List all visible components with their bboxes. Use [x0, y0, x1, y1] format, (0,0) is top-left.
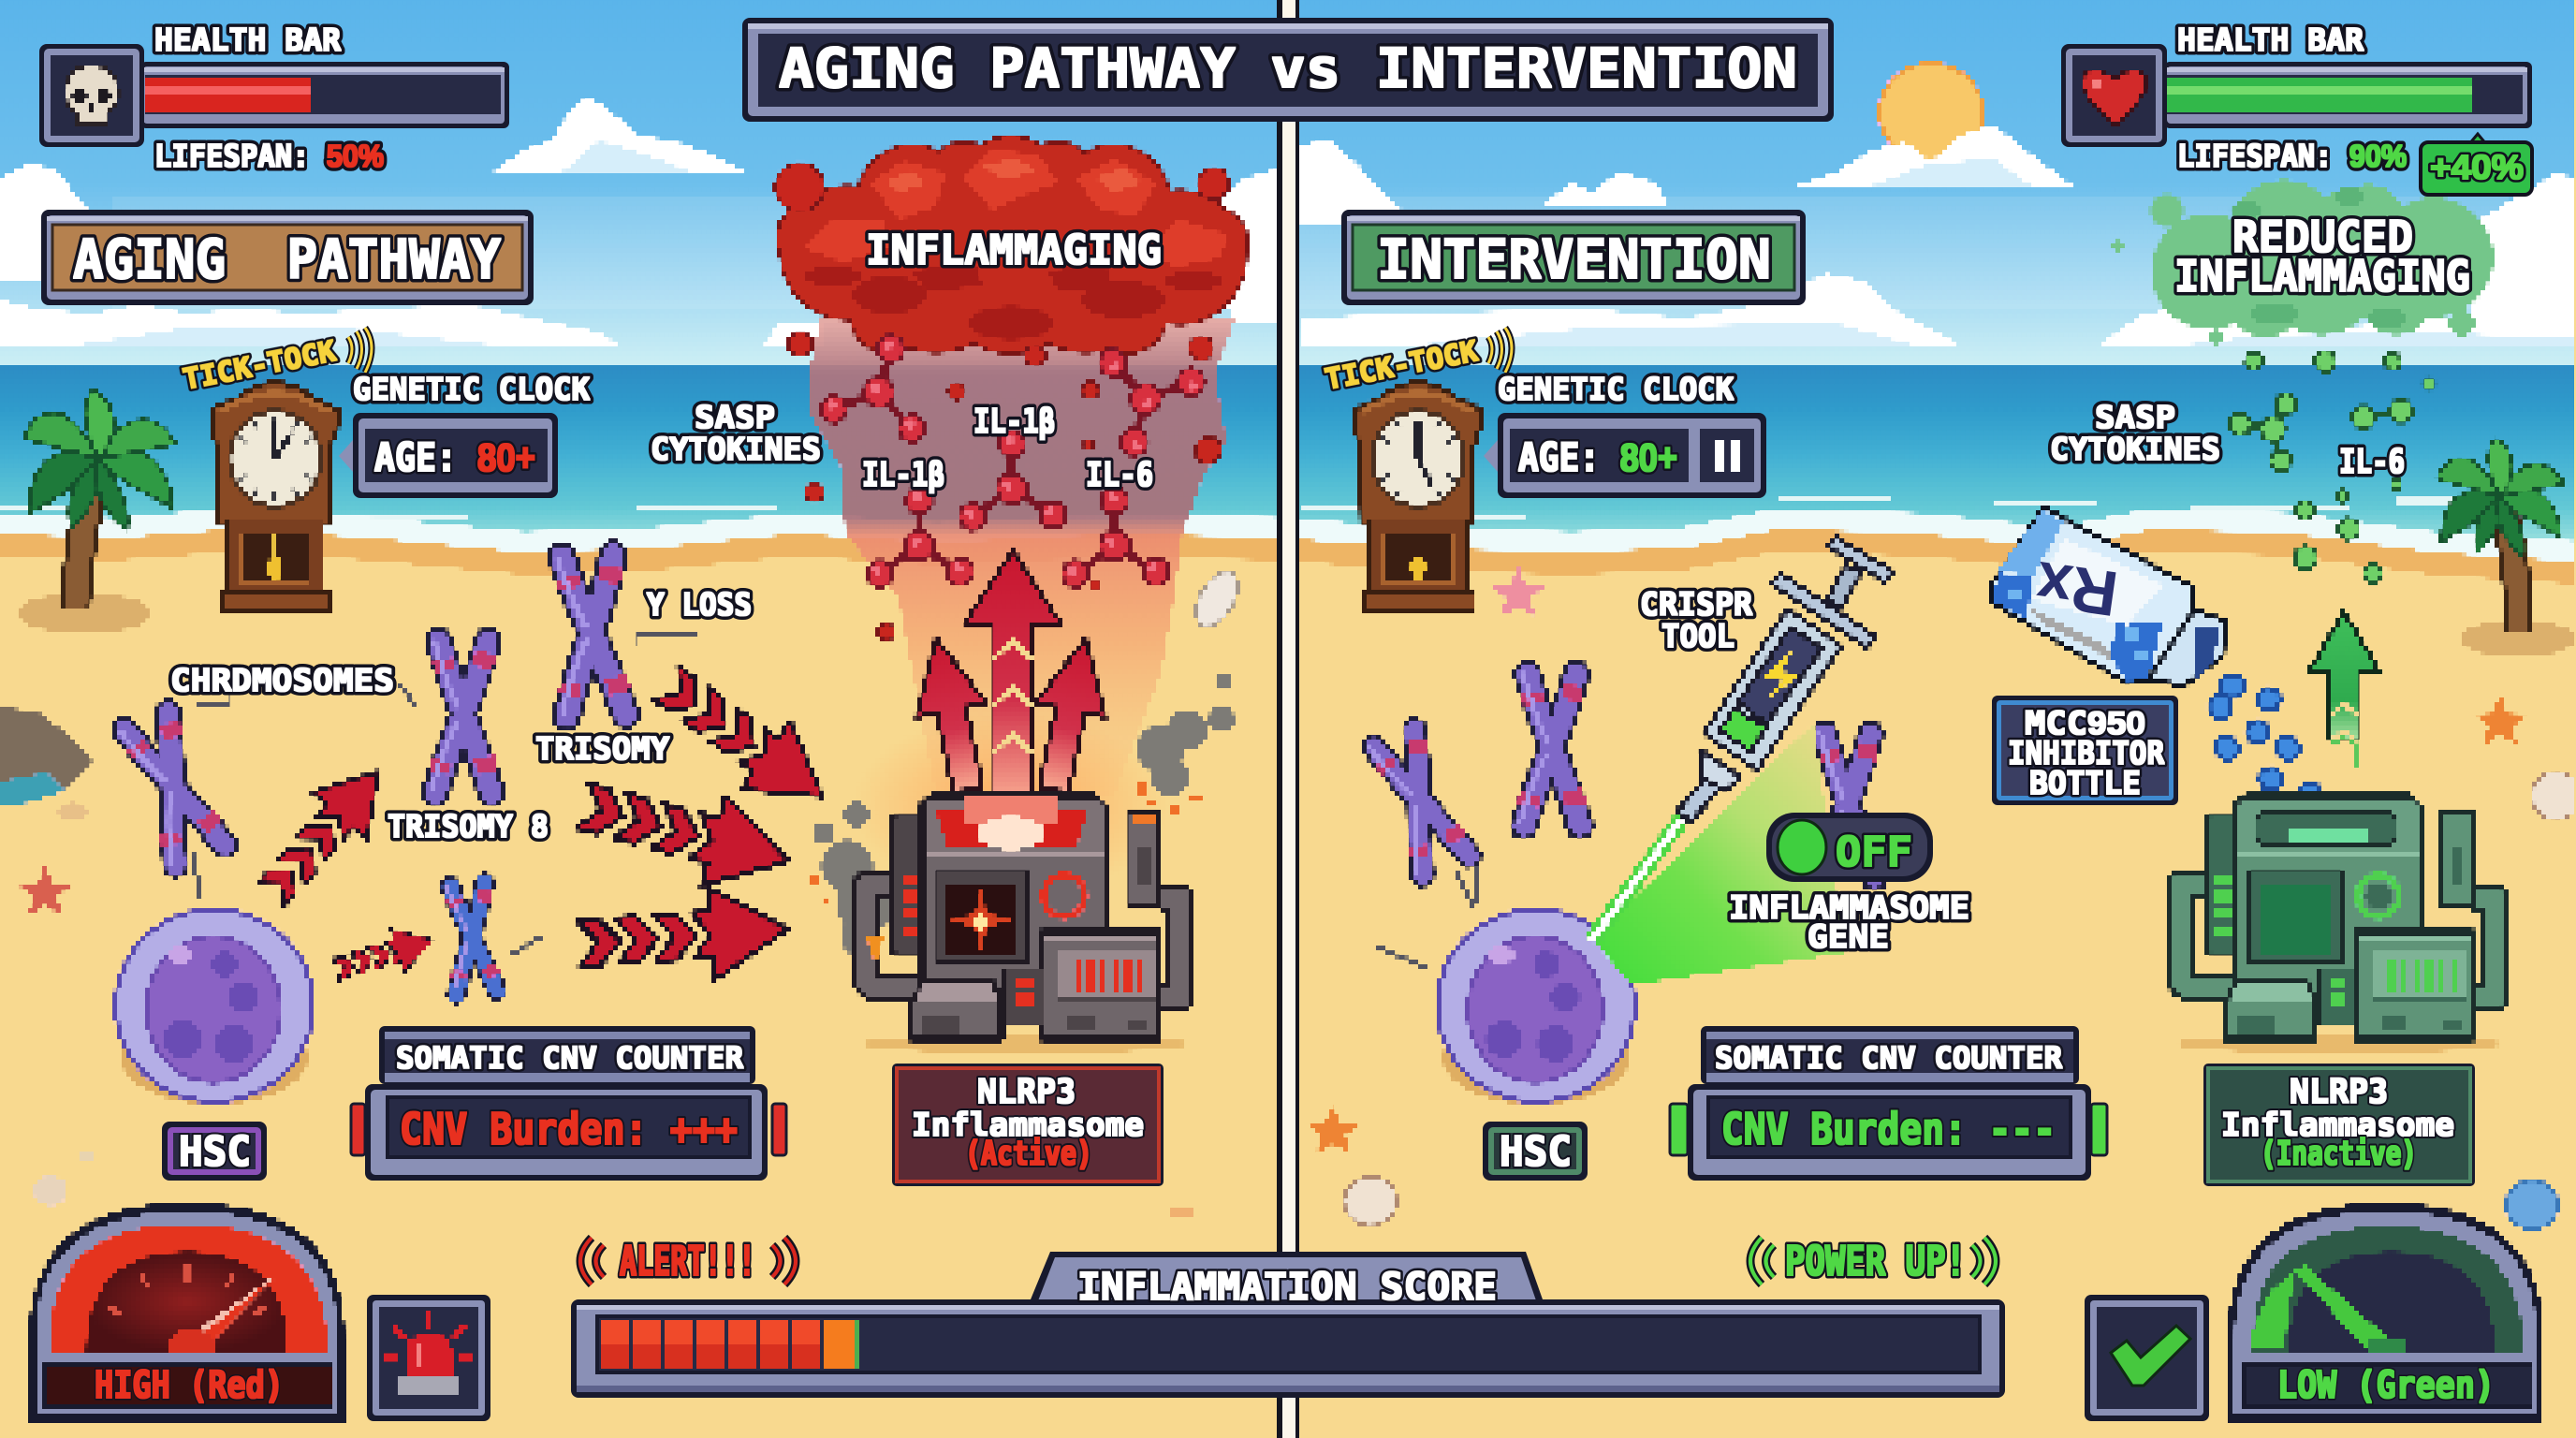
label: IL-6 right: IL-6 — [2339, 443, 2405, 481]
smoke: grey plumes — [812, 673, 1235, 957]
icon: right palm tree — [2437, 438, 2576, 657]
machine: active NLRP3 inflammasome — [861, 796, 1189, 1053]
panel: age right with pause — [1484, 413, 1766, 498]
panel: CNV counter right: CNV Burden: --- — [1721, 1104, 2056, 1154]
label: reduced inflammaging: REDUCED — [2232, 212, 2413, 262]
label: SASP cytokines right — [2050, 399, 2220, 467]
label: SASP cytokines right: SASP — [2095, 399, 2175, 435]
arrows: red pathway arrows — [243, 649, 847, 991]
title banner — [742, 18, 1834, 122]
panel: age right with pause: AGE: 80+ — [1518, 434, 1677, 480]
panel: NLRP3 inactive — [2203, 1064, 2475, 1186]
badge: +40% — [2421, 134, 2532, 195]
icon: pause — [1715, 440, 1740, 472]
label: HSC left: HSC — [179, 1128, 251, 1176]
panel: age left: AGE: 80+ — [374, 434, 535, 480]
molecules: green IL-6 cytokines — [2229, 393, 2412, 471]
panel: NLRP3 inactive: NLRP3 — [2290, 1073, 2388, 1111]
panel: left health bar: LIFESPAN: 50% — [154, 138, 384, 174]
label: CRISPR tool — [1640, 586, 1753, 655]
panel: MCC950 inhibitor bottle: INHIBITOR — [2008, 735, 2164, 772]
panel: NLRP3 inactive: Inflammasome — [2221, 1107, 2454, 1144]
particles: red embers — [775, 163, 1229, 640]
chart: score segments — [601, 1320, 859, 1369]
connectors: chromosome callouts — [192, 633, 1477, 969]
panel: CNV counter right: SOMATIC CNV COUNTER — [1715, 1040, 2063, 1076]
panel: NLRP3 active: (Active) — [965, 1135, 1092, 1173]
cloud: reduced inflammaging — [2112, 180, 2494, 345]
label: IL-6 left: IL-6 — [1086, 456, 1153, 494]
label: reduced inflammaging — [2174, 212, 2470, 301]
label: genetic clock left: GENETIC CLOCK — [353, 371, 590, 407]
label: CRISPR tool: TOOL — [1661, 618, 1734, 655]
background: sea foam streaks — [0, 496, 2481, 519]
label: SASP cytokines right: CYTOKINES — [2050, 431, 2220, 467]
label: inflammasome gene: INFLAMMASOME — [1729, 889, 1969, 927]
label: Y loss: Y LOSS — [647, 586, 752, 623]
gauge: low green — [2228, 1203, 2543, 1421]
label: SASP cytokines left — [651, 399, 821, 467]
label: genetic clock right: GENETIC CLOCK — [1498, 371, 1734, 407]
chromosomes: intervention — [1368, 674, 1580, 876]
background: sand — [0, 551, 2576, 1438]
label: reduced inflammaging: INFLAMMAGING — [2174, 251, 2470, 301]
label: IL-1b left: IL-1β — [862, 456, 944, 494]
panel: NLRP3 active — [892, 1064, 1164, 1186]
decoration: left rock — [0, 707, 94, 805]
effect: inflammaging smoke column — [809, 316, 1236, 796]
badge: +40%: +40% — [2430, 148, 2524, 186]
label: SASP cytokines left: SASP — [695, 399, 775, 435]
panel: NLRP3 inactive: (Inactive) — [2261, 1135, 2417, 1173]
label: HSC right — [1483, 1122, 1588, 1181]
label: IL-1b top: IL-1β — [973, 403, 1055, 441]
label: SASP cytokines left: CYTOKINES — [651, 431, 821, 467]
panel: CNV counter left: CNV Burden: +++ — [400, 1104, 738, 1154]
background: wet sand — [0, 529, 2576, 1438]
toggle: inflammasome off: OFF — [1836, 829, 1912, 876]
cell: left HSC — [113, 907, 315, 1105]
label: trisomy: TRISOMY — [535, 730, 669, 767]
icon: CRISPR syringe — [1677, 537, 1893, 822]
arrows: three rising red arrows — [901, 550, 1120, 800]
background: shore foam — [0, 508, 2576, 1417]
panel: right health bar: LIFESPAN: 90% — [2177, 138, 2407, 174]
icon: alarm box — [367, 1295, 490, 1421]
label: inflammaging: INFLAMMAGING — [866, 227, 1162, 274]
label: HSC left — [162, 1122, 267, 1181]
icon: right genetic clock — [1354, 383, 1481, 612]
heading: intervention — [1341, 210, 1806, 305]
panel: right health bar — [2061, 22, 2532, 195]
icon: MCC950 bottle — [1991, 507, 2225, 686]
effect: reactor glow — [852, 712, 1170, 899]
label: inflammasome gene: GENE — [1808, 918, 1889, 956]
particles: green cytokine dots — [2246, 351, 2435, 583]
label: tick-tock right: TICK-TOCK — [1323, 335, 1480, 397]
particles: sparks — [810, 782, 1202, 902]
beam: green CRISPR cone — [1591, 724, 1846, 985]
icon: skull — [66, 66, 118, 124]
label: HSC right: HSC — [1500, 1128, 1572, 1176]
background: sky — [0, 0, 2576, 367]
panel: CNV counter left — [351, 1026, 786, 1181]
callout: alert: ALERT!!! — [620, 1238, 755, 1285]
label: tick-tock left: TICK-TOCK — [181, 335, 338, 397]
heading: aging pathway: AGING PATHWAY — [73, 227, 501, 291]
background: sea — [0, 365, 2576, 543]
callout: power up: POWER UP! — [1785, 1238, 1966, 1285]
icon: sun — [1880, 64, 1983, 161]
panel: age left — [339, 413, 558, 498]
heading: aging pathway — [41, 210, 534, 305]
divider: centre line — [1277, 0, 1299, 1438]
pills: falling blue pills — [2209, 675, 2321, 831]
machine: inactive NLRP3 inflammasome — [2175, 796, 2503, 1053]
label: inflammasome gene — [1729, 889, 1969, 956]
cell: right HSC — [1435, 907, 1637, 1105]
icon: check box — [2085, 1295, 2209, 1421]
panel: MCC950 inhibitor bottle: BOTTLE — [2029, 765, 2141, 802]
chromosomes: aging — [118, 555, 625, 994]
panel: MCC950 inhibitor bottle: MCC950 — [2025, 705, 2145, 742]
background: cloud shading — [56, 140, 2576, 348]
label: Rx on bottle: Rx — [2031, 548, 2122, 629]
title banner: AGING PATHWAY vs INTERVENTION — [779, 37, 1797, 100]
icon: starfish — [18, 566, 2527, 1154]
icon: heart — [2083, 70, 2146, 126]
panel: inflammation score — [571, 1252, 2005, 1398]
background: clouds — [0, 96, 2576, 348]
panel: CNV counter left: SOMATIC CNV COUNTER — [396, 1040, 744, 1076]
gauge: high red — [29, 1203, 344, 1421]
panel: NLRP3 active: NLRP3 — [977, 1073, 1076, 1111]
molecules: IL-1b and IL-6 cytokines — [818, 323, 1207, 587]
label: trisomy 8: TRISOMY 8 — [388, 808, 549, 844]
gauge: high red: HIGH (Red) — [95, 1364, 284, 1407]
panel: NLRP3 active: Inflammasome — [912, 1107, 1144, 1144]
cloud: inflammaging — [775, 135, 1250, 355]
panel: MCC950 inhibitor bottle — [1992, 696, 2178, 805]
panel: inflammation score: INFLAMMATION SCORE — [1077, 1266, 1497, 1309]
label: CRISPR tool: CRISPR — [1640, 586, 1753, 624]
chromosome: inflammasome gene — [1818, 734, 1874, 878]
panel: left health bar — [39, 22, 509, 174]
label: chromosomes: CHRDMOSOMES — [170, 662, 394, 698]
icon: left palm tree — [17, 389, 176, 634]
icon: left genetic clock — [212, 383, 338, 612]
background: sky haze band — [112, 195, 2509, 307]
arrow: rising green arrow — [2309, 611, 2379, 770]
panel: right health bar: HEALTH BAR — [2177, 22, 2364, 58]
panel: left health bar: HEALTH BAR — [154, 22, 341, 58]
icon: shells and pebbles — [34, 565, 2576, 1229]
panel: CNV counter right — [1670, 1026, 2107, 1181]
beam: CRISPR laser — [1591, 814, 1685, 941]
toggle: inflammasome off — [1766, 813, 1933, 882]
gauge: low green: LOW (Green) — [2277, 1364, 2495, 1407]
heading: intervention: INTERVENTION — [1377, 227, 1771, 291]
